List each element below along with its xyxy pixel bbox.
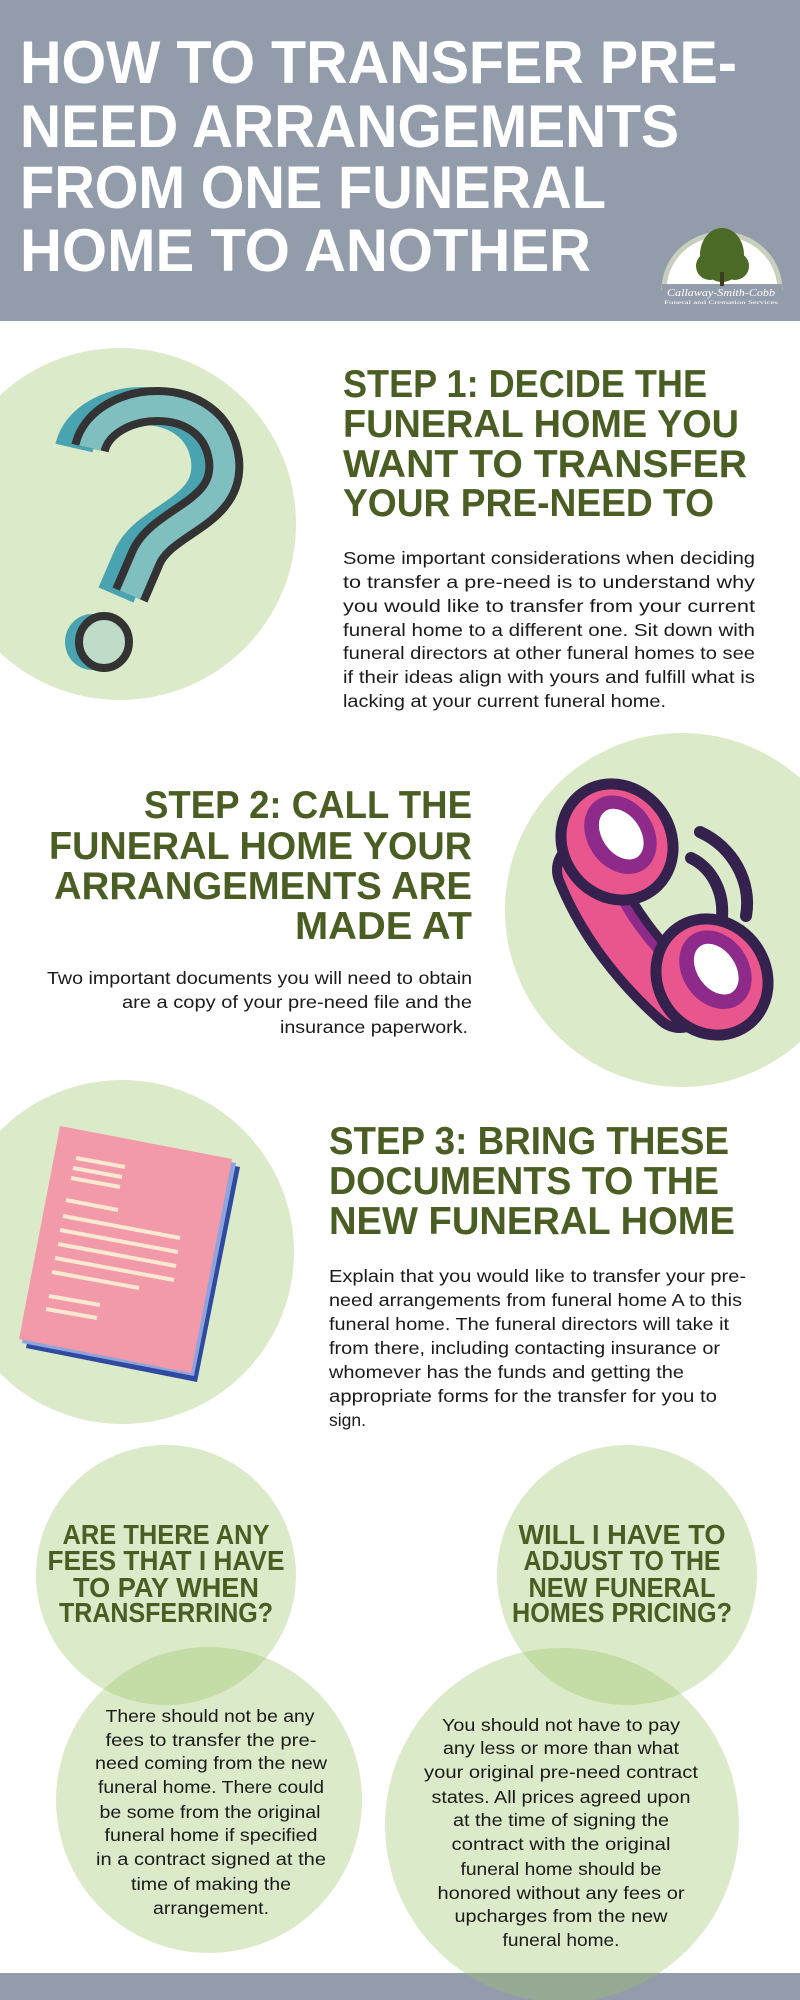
heading: step 3: STEP 3: BRING THESE [329, 1120, 729, 1163]
circle: pricing answer [385, 1648, 739, 2000]
circle: step 2 background [505, 733, 800, 1087]
text: fees answer: fees to transfer the pre- [106, 1730, 317, 1750]
circle: step 3 background [0, 1080, 294, 1424]
text: step 3 body: appropriate forms for the transfer for you to [329, 1386, 717, 1406]
text: step 2 body: insurance paperwork. [280, 1017, 468, 1037]
heading: step 3: NEW FUNERAL HOME [329, 1200, 735, 1243]
panel: FAQ fees [36, 1445, 362, 1953]
heading: fees question: ARE THERE ANY [62, 1519, 270, 1550]
logo: Callaway-Smith-Cobb: Callaway-Smith-Cobb [667, 287, 776, 299]
text: step 2 body: Two important documents you will need to obtain [47, 968, 472, 988]
panel: step 1 [0, 348, 755, 711]
heading: pricing question: HOMES PRICING? [512, 1597, 732, 1628]
heading: pricing question: WILL I HAVE TO [518, 1519, 726, 1550]
text: step 1 body: Some important considerations when deciding [343, 548, 755, 568]
text: step 3 body: Explain that you would like to transfer your pre- [329, 1266, 746, 1286]
panel: step 2 [47, 733, 800, 1087]
text: fees answer: be some from the original [100, 1802, 320, 1822]
text: step 2 body: are a copy of your pre-need file and the [122, 992, 472, 1012]
icon: documents [19, 1126, 240, 1382]
text: step 3 body: whomever has the funds and getting the [328, 1362, 684, 1382]
text: pricing answer: contract with the original [452, 1834, 670, 1854]
heading: step 1: FUNERAL HOME YOU [343, 403, 739, 446]
text: fees answer: in a contract signed at the [96, 1849, 326, 1869]
text: fees answer: funeral home if specified [104, 1825, 318, 1845]
text: pricing answer: any less or more than what [443, 1738, 679, 1758]
heading: step 3 [329, 1120, 735, 1243]
icon: phone [538, 762, 791, 1057]
text: step 3 body: funeral home. The funeral directors will take it [329, 1314, 729, 1334]
text: step 1 body: funeral directors at other funeral homes to see [343, 643, 755, 663]
text: fees answer: arrangement. [153, 1898, 269, 1918]
title: HOME TO ANOTHER [20, 217, 591, 284]
heading: step 1 [343, 363, 747, 525]
heading: fees question [48, 1519, 284, 1628]
heading: step 3: DOCUMENTS TO THE [329, 1160, 719, 1203]
logo: Callaway-Smith-Cobb: Funeral and Cremation Services [664, 300, 778, 306]
heading: step 1: WANT TO TRANSFER [343, 443, 747, 486]
heading: step 2: FUNERAL HOME YOUR [49, 825, 472, 868]
text: step 1 body: to transfer a pre-need is to understand why [343, 572, 755, 592]
panel: step 3 [0, 1080, 746, 1430]
text: fees answer: need coming from the new [95, 1753, 327, 1773]
text: step 1 body: funeral home to a different one. Sit down with [343, 620, 755, 640]
text: step 3 body: sign. [329, 1410, 366, 1430]
heading: step 2 [49, 784, 472, 948]
text: fees answer: time of making the [131, 1874, 291, 1894]
text: pricing answer [424, 1715, 698, 1950]
heading: pricing question: ADJUST TO THE [524, 1545, 720, 1576]
circle: step 1 background [0, 348, 296, 700]
heading: step 2: MADE AT [295, 905, 472, 948]
circle: fees question [36, 1445, 296, 1705]
title [20, 29, 737, 284]
text: pricing answer: upcharges from the new [454, 1906, 668, 1926]
text: fees answer [95, 1706, 327, 1918]
heading: step 2: STEP 2: CALL THE [144, 784, 472, 827]
heading: fees question: TRANSFERRING? [59, 1597, 273, 1628]
text: fees answer: There should not be any [106, 1706, 315, 1726]
text: pricing answer: funeral home should be [460, 1859, 662, 1879]
text: step 1 body [343, 548, 755, 711]
heading: step 2: ARRANGEMENTS ARE [54, 865, 472, 908]
heading: fees question: FEES THAT I HAVE [48, 1545, 284, 1576]
circle: fees answer [56, 1647, 362, 1953]
heading: step 1: YOUR PRE-NEED TO [343, 482, 714, 525]
text: fees answer: funeral home. There could [98, 1777, 324, 1797]
heading: pricing question [512, 1519, 732, 1628]
heading: fees question: TO PAY WHEN [73, 1572, 259, 1603]
text: step 1 body: you would like to transfer from your current [343, 596, 755, 616]
text: step 3 body: from there, including contacting insurance or [329, 1338, 720, 1358]
heading: pricing question: NEW FUNERAL [528, 1572, 716, 1603]
text: step 1 body: lacking at your current funeral home. [343, 691, 666, 711]
title: HOW TO TRANSFER PRE- [20, 29, 737, 96]
text: pricing answer: your original pre-need contract [424, 1762, 698, 1782]
circle: pricing question [497, 1445, 757, 1705]
text: pricing answer: funeral home. [502, 1930, 620, 1950]
text: pricing answer: honored without any fees or [438, 1883, 685, 1903]
text: step 3 body [328, 1266, 746, 1430]
title: FROM ONE FUNERAL [20, 154, 606, 221]
text: step 1 body: if their ideas align with yours and fulfill what is [343, 667, 755, 687]
title: NEED ARRANGEMENTS [20, 93, 679, 160]
text: pricing answer: states. All prices agreed upon [432, 1787, 690, 1807]
logo: Callaway-Smith-Cobb [662, 228, 782, 306]
text: pricing answer: at the time of signing the [453, 1810, 669, 1830]
heading: step 1: STEP 1: DECIDE THE [343, 363, 707, 406]
text: step 3 body: need arrangements from funeral home A to this [329, 1290, 742, 1310]
footer band [0, 1973, 800, 2000]
text: step 2 body [47, 968, 472, 1037]
text: pricing answer: You should not have to pay [442, 1715, 680, 1735]
panel: FAQ pricing [385, 1445, 757, 2000]
icon: question mark [65, 406, 224, 670]
header band [0, 0, 800, 321]
